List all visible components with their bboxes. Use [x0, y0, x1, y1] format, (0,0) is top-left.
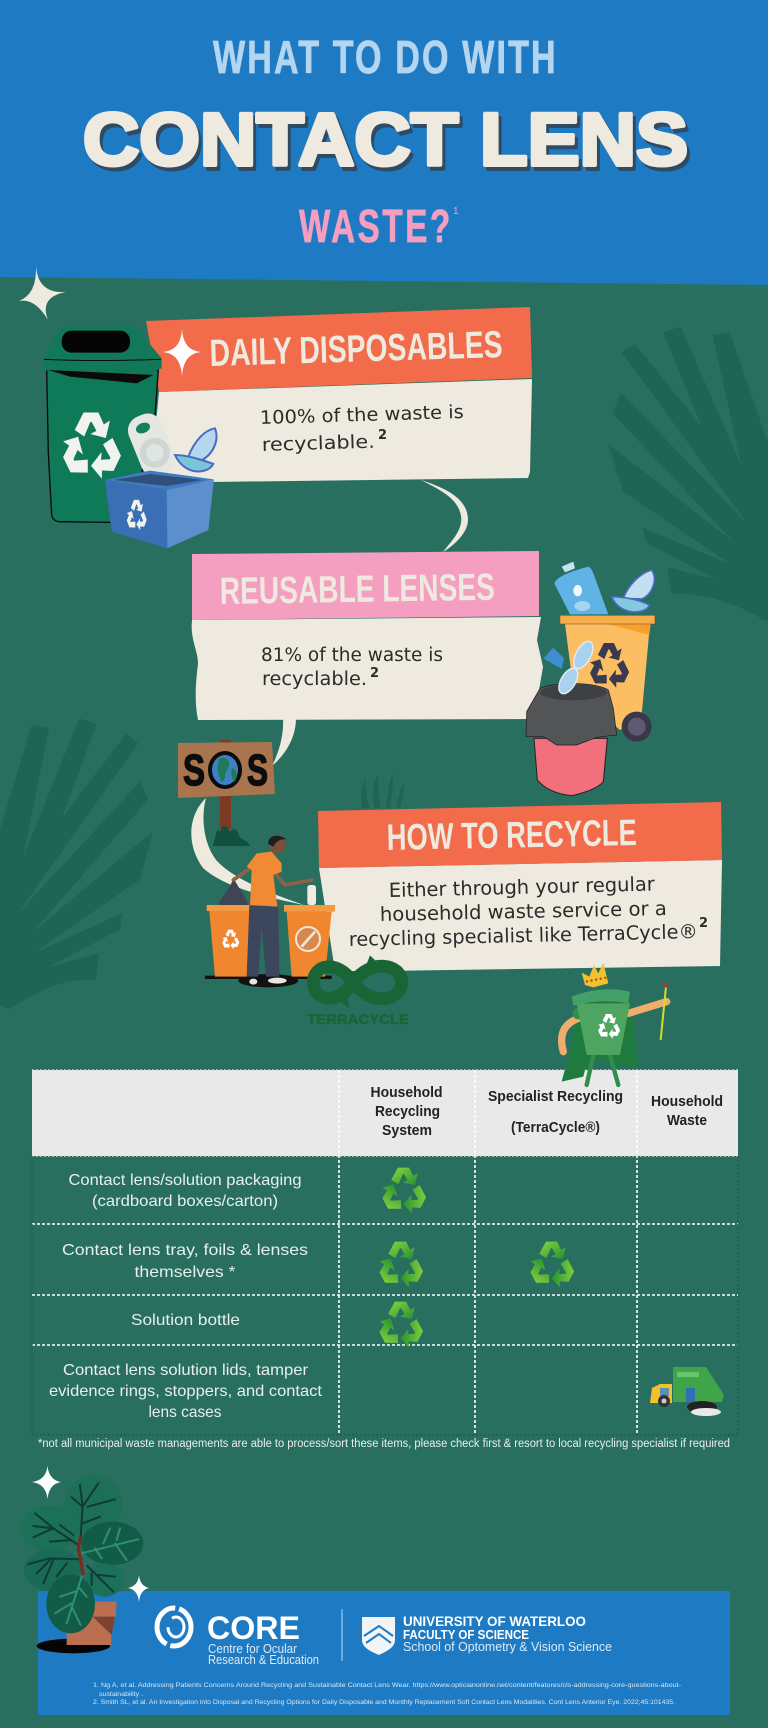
body text: 2 — [370, 666, 379, 681]
body text: recycling specialist like TerraCycle® — [349, 920, 698, 951]
logo: TerraCycle — [307, 955, 409, 1027]
left bin — [207, 905, 249, 977]
globe — [210, 753, 240, 787]
references: sustainability . — [99, 1691, 143, 1698]
body text: Either through your regular — [389, 872, 656, 902]
column headers: System — [382, 1123, 432, 1139]
column headers: Household — [651, 1094, 723, 1110]
footer band — [38, 1591, 730, 1715]
row labels: lens cases — [148, 1404, 222, 1421]
body text: 2 — [699, 916, 708, 931]
blister pack — [123, 409, 180, 481]
illustration: king bin mascot — [562, 963, 668, 1085]
pink can — [534, 738, 607, 796]
body text — [349, 872, 708, 951]
shirt — [247, 852, 282, 907]
heading: how to recycle: HOW TO RECYCLE — [386, 812, 637, 858]
icon: recycle, bottle row — [375, 1302, 426, 1350]
title line 2: CONTACT LENS — [86, 102, 691, 185]
column headers: (TerraCycle®) — [511, 1120, 600, 1136]
table — [32, 1070, 738, 1450]
sparkle plant top — [32, 1466, 61, 1499]
logo: CORE: Research & Education — [208, 1653, 319, 1667]
SOS letters: S — [247, 746, 268, 795]
lens tray falling — [555, 638, 597, 697]
column headers: Waste — [667, 1113, 707, 1129]
column headers: Recycling — [375, 1104, 440, 1120]
trousers — [247, 906, 279, 977]
header band — [0, 0, 768, 285]
logo: University of Waterloo: UNIVERSITY OF WATERLOO — [403, 1613, 586, 1629]
heading: reusable lenses: REUSABLE LENSES — [219, 567, 495, 613]
shoes — [249, 979, 257, 985]
SOS letters — [183, 746, 268, 795]
icon: green bin with lens items — [43, 326, 216, 548]
sparkle on panel 1 — [162, 329, 202, 377]
table header row — [32, 1070, 738, 1156]
row labels — [49, 1172, 323, 1421]
heading: daily disposables: DAILY DISPOSABLES — [209, 324, 503, 375]
column headers: Household — [370, 1085, 442, 1101]
row labels: Solution bottle — [131, 1312, 240, 1329]
body text: 100% of the waste is — [260, 402, 464, 429]
logo: CORE: CORE — [207, 1610, 300, 1646]
column headers — [370, 1085, 723, 1139]
row labels: themselves * — [134, 1264, 236, 1281]
body text — [260, 402, 464, 456]
panel: daily disposables — [146, 307, 532, 484]
row labels: Contact lens tray, foils & lenses — [62, 1242, 308, 1259]
lens case — [175, 428, 216, 471]
title line 2: CONTACT LENS — [83, 98, 688, 181]
references: 2. Smith SL, et al. An Investigation into Disposal and Recycling Options for Daily Disposable and Monthly Replacement Soft Contact Lens Modalities. Cont Lens Anterior Eye. 2022;45:101435. — [93, 1699, 675, 1706]
yellow bin body — [565, 624, 650, 730]
logo: University of Waterloo: FACULTY OF SCIENCE — [403, 1627, 529, 1642]
sparkle top left — [19, 266, 66, 320]
table grid — [32, 1070, 738, 1435]
row labels: (cardboard boxes/carton) — [92, 1193, 278, 1210]
decorative palm left — [0, 718, 153, 1009]
icon: SOS sign — [178, 740, 275, 846]
title line 3: WASTE? — [299, 202, 450, 252]
row labels: Contact lens/solution packaging — [68, 1172, 302, 1189]
logo: CORE — [157, 1608, 319, 1667]
footnote marker: 1 — [453, 206, 459, 217]
row labels: Contact lens solution lids, tamper — [63, 1362, 309, 1379]
illustration: potted plant — [20, 1475, 143, 1653]
body text: recyclable. — [262, 669, 367, 690]
logo: University of Waterloo: School of Optometry & Vision Science — [403, 1639, 612, 1654]
panel: reusable lenses — [192, 551, 543, 720]
body text: 2 — [378, 428, 387, 443]
icon: background grass — [361, 773, 404, 808]
panel: how to recycle — [318, 802, 722, 971]
illustration: man recycling — [205, 835, 335, 987]
column headers: Specialist Recycling — [488, 1089, 623, 1105]
bottle — [307, 885, 316, 905]
dark recycle mark — [586, 643, 632, 690]
blue chip — [543, 648, 564, 669]
icon: yellow bin and pink bin — [526, 562, 655, 796]
logo: University of Waterloo — [362, 1613, 612, 1655]
solution bottle — [554, 562, 608, 614]
icon: recycle, packaging row — [378, 1168, 429, 1216]
body text: 81% of the waste is — [261, 645, 443, 666]
icon: recycle, tray row household — [375, 1242, 426, 1290]
footnote: *not all municipal waste managements are able to process/sort these items, please check first & resort to local recycling specialist if required — [38, 1438, 730, 1450]
head — [269, 835, 286, 853]
lens case — [612, 570, 654, 612]
sparkle plant bottom — [128, 1575, 149, 1602]
logo: CORE: Centre for Ocular — [208, 1642, 297, 1656]
references: 1. Ng A, et al. Addressing Patients Concerns Around Recycling and Sustainable Contact Lens Wear. https://www.opticianonline.net/content/features/cls-addressing-core-questions-about- — [93, 1682, 681, 1689]
connector ribbon 1 — [421, 480, 468, 552]
title line 1: WHAT TO DO WITH — [213, 31, 556, 83]
references — [93, 1682, 681, 1706]
body text — [261, 645, 443, 690]
decorative palm right — [608, 327, 768, 620]
connector ribbon 2 — [191, 718, 304, 905]
body text: household waste service or a — [380, 897, 667, 926]
right bin — [284, 905, 335, 977]
white recycle mark — [57, 412, 125, 483]
wheel — [622, 712, 652, 742]
blue box — [105, 480, 167, 548]
black bag — [218, 877, 248, 905]
body text: recyclable. — [262, 432, 375, 456]
SOS letters: S — [183, 746, 205, 795]
icon: recycle, tray row specialist — [526, 1242, 577, 1290]
icon: garbage truck — [650, 1367, 724, 1416]
black bag — [526, 684, 617, 745]
logo wordmark: TERRACYCLE — [307, 1011, 409, 1027]
row labels: evidence rings, stoppers, and contact — [49, 1383, 323, 1400]
arms — [233, 868, 312, 885]
